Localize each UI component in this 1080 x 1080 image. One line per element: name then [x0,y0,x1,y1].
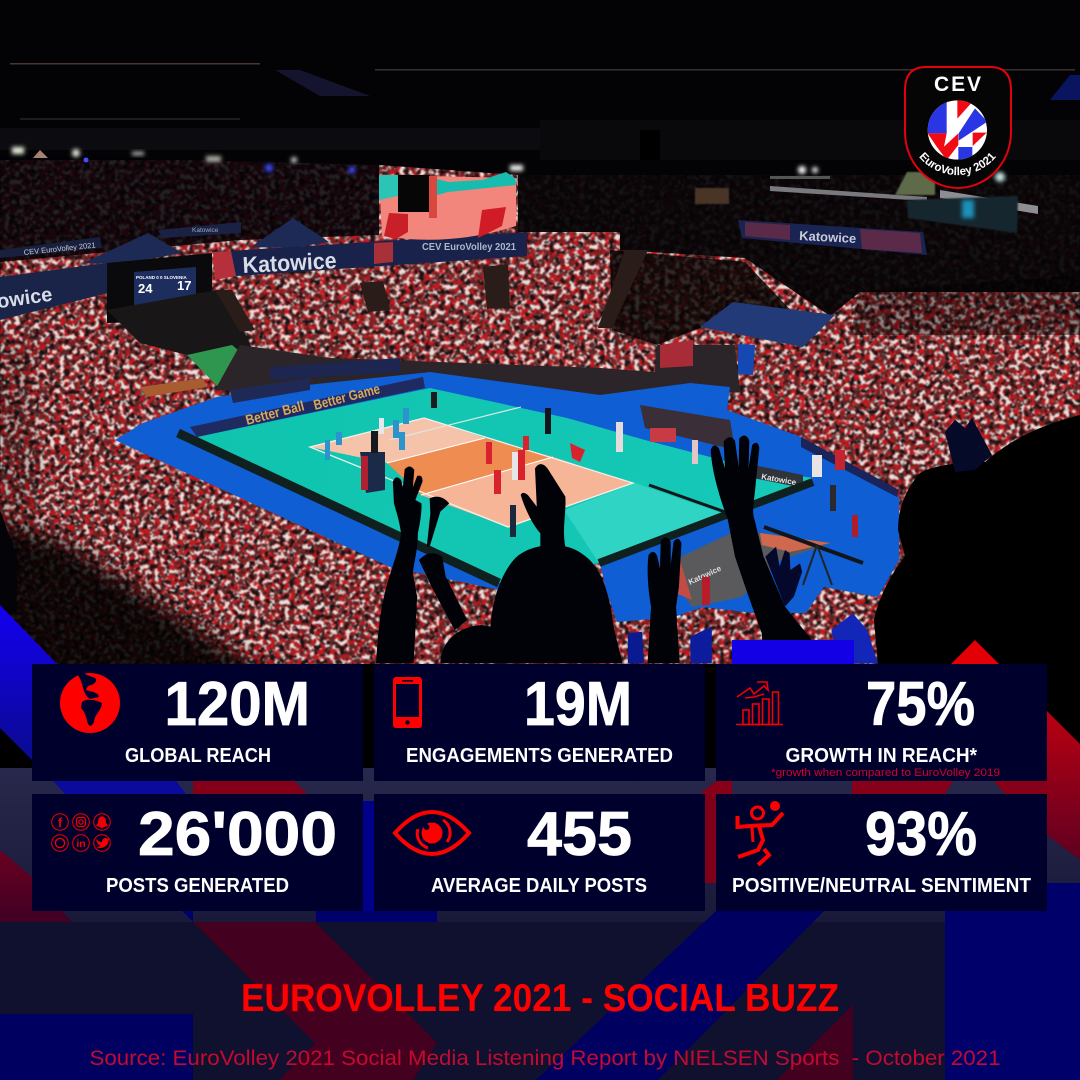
title: EUROVOLLEY 2021 - SOCIAL BUZZ [241,977,839,1020]
players [325,392,858,605]
blue floor [115,372,899,622]
source line: Source: EuroVolley 2021 Social Media Listening Report by NIELSEN Sports - October 2021 [90,1046,1000,1070]
icon: eye [395,812,469,854]
volleyball court [197,388,813,583]
blue seat block [700,302,835,347]
icons: social networks: f [58,815,63,830]
stat: 455: 455 [527,800,632,869]
stat: 26'000: 26'000 [138,800,337,869]
scoreboard: 24 [138,281,153,296]
ceiling lights and trusses [12,75,1080,233]
sponsor board [190,377,425,437]
big video screen [379,172,516,240]
dark media zone [107,290,262,385]
panel: average daily posts [374,794,705,911]
left edge silhouette [0,510,18,625]
scoreboard [107,253,212,323]
label: positive/neutral sentiment: POSITIVE/NEUTRAL SENTIMENT [732,874,1031,897]
panel: global reach [32,664,363,781]
courtside barrier and camera booms [178,433,863,585]
right Katowice banner: Katowice [799,228,857,246]
left side arena banners: Katowice [192,227,219,234]
left side arena banners [0,218,329,320]
icon: volleyball player [738,801,783,865]
orange seats [140,378,207,397]
grey floor mat: Katowice [687,564,723,587]
panel: growth in reach [716,664,1047,781]
grey floor mat [650,533,831,607]
lower geometric background [0,605,1080,1080]
panel: posts generated [32,794,363,911]
crowd stands [0,160,1080,664]
aisle stairs [215,250,648,332]
stat: 93%: 93% [865,800,977,869]
fan silhouettes [376,435,878,663]
raised hand at right [945,418,992,472]
ceiling structure [0,0,1080,175]
right Katowice banner [738,220,927,255]
label: global reach: GLOBAL REACH [125,744,271,767]
center banner with Katowice lettering [213,232,527,280]
icons: social networks [52,814,110,851]
stat: 120M: 120M [164,670,310,739]
green steps [187,345,262,386]
large foreground silhouette [874,415,1080,664]
label: growth in reach: GROWTH IN REACH* [786,744,977,767]
stand shading [0,155,1080,690]
logo: CEV EuroVolley 2021: CEV [934,73,981,96]
stadium photo [0,0,1080,768]
label: average daily posts: AVERAGE DAILY POSTS [431,874,647,897]
panel: positive/neutral sentiment [716,794,1047,911]
logo: CEV EuroVolley 2021 [904,66,1012,189]
left side arena banners: CEV EuroVolley 2021 [23,240,96,257]
icon: growth chart [736,682,783,724]
footnote: *growth when compared to EuroVolley 2019 [771,767,1000,779]
scoreboard: 17 [177,278,191,293]
logo: CEV EuroVolley 2021: EuroVolley 2021 [919,152,996,176]
courtside people strip [215,345,740,400]
stat: 19M: 19M [524,670,632,739]
icons: social networks: in [76,838,86,850]
center banner with Katowice lettering: CEV EuroVolley 2021 [422,242,516,253]
stat: 75%: 75% [866,670,975,739]
side boards [230,340,899,497]
icon: globe [60,673,120,733]
label: engagements generated: ENGAGEMENTS GENERATED [406,744,673,767]
icon: smartphone [393,677,422,728]
panel: engagements generated [374,664,705,781]
volleyball court: Katowice [761,472,797,487]
center banner with Katowice lettering: Katowice [242,247,337,278]
label: posts generated: POSTS GENERATED [106,874,289,897]
scoreboard: POLAND 0 0 SLOVENIA [136,275,188,280]
logo ball [928,100,987,160]
sponsor board: Better Ball [244,397,306,428]
sponsor board: Better Game [312,380,382,413]
